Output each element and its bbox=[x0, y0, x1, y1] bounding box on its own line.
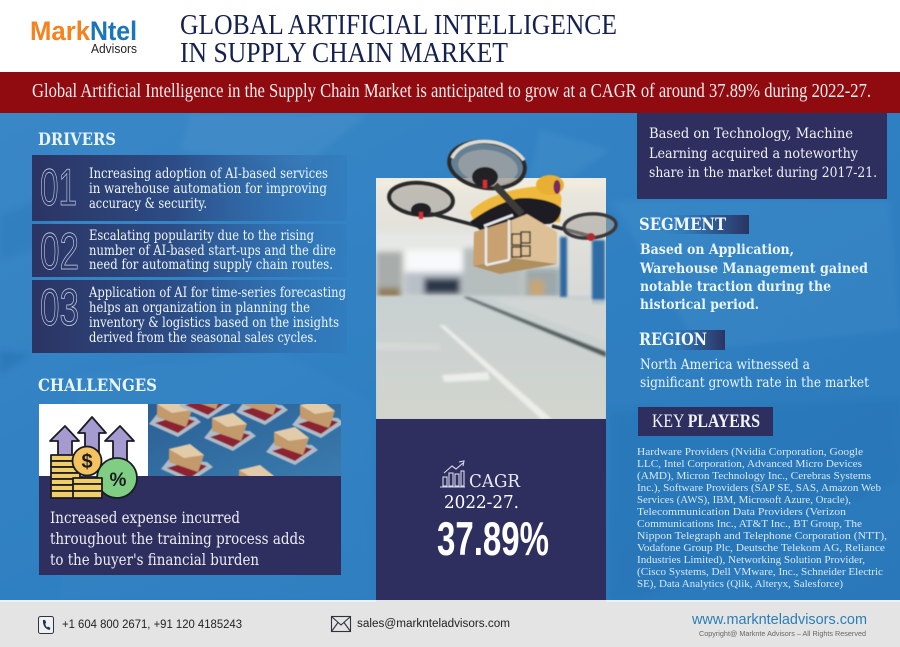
driver 01 bbox=[32, 155, 347, 221]
panel: challenges: % bbox=[110, 470, 127, 491]
segment text: historical period. bbox=[640, 297, 759, 313]
key players list: Hardware Providers (Nvidia Corporation, Google bbox=[637, 446, 863, 458]
panel: technology callout bbox=[637, 113, 887, 199]
panel: challenges: $ bbox=[81, 451, 93, 473]
region text: significant growth rate in the market bbox=[640, 375, 870, 391]
cagr label: CAGR bbox=[469, 471, 520, 492]
driver 02: number of AI-based start-ups and the dire bbox=[89, 243, 336, 259]
segment text: notable traction during the bbox=[640, 279, 831, 295]
title: IN SUPPLY CHAIN MARKET bbox=[180, 37, 508, 69]
segment text: Based on Application, bbox=[640, 242, 794, 258]
right rotor bbox=[563, 212, 617, 241]
driver 03: helps an organization in planning the bbox=[89, 300, 310, 316]
key players list: Communications Inc., AT&T Inc., BT Group, The bbox=[637, 518, 862, 530]
challenge text: Increased expense incurred bbox=[50, 509, 240, 527]
driver 01: accuracy & security. bbox=[89, 196, 207, 212]
top rotor bbox=[446, 137, 528, 214]
key players list: (Cisco Systems, Dell VMware, Inc., Schneider Electric bbox=[637, 566, 883, 578]
heading: region: REGION bbox=[639, 330, 707, 350]
left rotor bbox=[388, 180, 454, 219]
segment text: Warehouse Management gained bbox=[639, 261, 868, 277]
arms bbox=[425, 212, 590, 236]
panel: challenges bbox=[39, 404, 341, 575]
driver 02: 02 bbox=[40, 223, 79, 281]
key players list: Inc.), Software Providers (SAP SE, SAS, Amazon Web bbox=[637, 482, 882, 494]
key players list: LLC, Intel Corporation, Advanced Micro Devices bbox=[637, 458, 862, 470]
title bbox=[180, 9, 617, 69]
logo: MarkNtel Advisors: Advisors bbox=[91, 42, 137, 56]
drone body bbox=[470, 186, 562, 224]
driver 02 bbox=[32, 223, 347, 281]
driver 03: derived from the seasonal sales cycles. bbox=[89, 330, 317, 346]
driver 01: 01 bbox=[40, 159, 77, 217]
heading: key players: KEY PLAYERS bbox=[652, 412, 760, 432]
icon: envelope bbox=[332, 616, 350, 632]
icon: rising costs bbox=[50, 417, 137, 498]
driver 03: Application of AI for time-series forecasting bbox=[88, 285, 346, 301]
key players list bbox=[637, 446, 887, 590]
phone numbers: +1 604 800 2671, +91 120 4185243 bbox=[62, 619, 242, 631]
email: sales@marknteladvisors.com bbox=[357, 618, 510, 630]
parcel bbox=[473, 220, 512, 266]
driver 02: Escalating popularity due to the rising bbox=[89, 228, 314, 244]
copyright: Copyright@ Marknte Advisors – All Rights Reserved bbox=[699, 629, 866, 638]
driver 03 bbox=[32, 279, 347, 353]
driver 03: 03 bbox=[40, 279, 79, 337]
photo: boxes on robots bbox=[148, 404, 341, 476]
red banner bbox=[0, 72, 900, 113]
challenge text: throughout the training process adds bbox=[50, 530, 305, 548]
website: www.marknteladvisors.com bbox=[691, 611, 867, 628]
logo: MarkNtel Advisors: Mark bbox=[30, 16, 91, 46]
cagr value: 37.89% bbox=[437, 512, 549, 565]
heading: key players bbox=[638, 407, 773, 436]
icon: delivery drone bbox=[388, 137, 617, 274]
navy text panel bbox=[39, 476, 341, 575]
region text bbox=[640, 357, 870, 391]
panel: CAGR bbox=[376, 419, 606, 600]
logo: MarkNtel Advisors bbox=[30, 16, 137, 56]
segment text bbox=[639, 242, 868, 313]
heading: segment: SEGMENT bbox=[639, 215, 726, 235]
icon: growth chart bbox=[440, 461, 465, 487]
logo: MarkNtel Advisors: Ntel bbox=[90, 16, 137, 46]
challenge text: to the buyer's financial burden bbox=[50, 551, 259, 569]
driver 01: in warehouse automation for improving bbox=[89, 181, 327, 197]
cagr period: 2022-27. bbox=[444, 492, 519, 513]
key players list: Nippon Telegraph and Telephone Corporation (NTT), bbox=[637, 530, 887, 542]
background: blue panel bbox=[0, 113, 900, 600]
heading: challenges: CHALLENGES bbox=[38, 376, 157, 396]
title: GLOBAL ARTIFICIAL INTELLIGENCE bbox=[180, 9, 617, 41]
key players list: Services (AWS), IBM, Microsoft Azure, Oracle), bbox=[637, 494, 851, 506]
driver 03: inventory & logistics based on the insights bbox=[89, 315, 339, 331]
panel: technology callout: share in the market during 2017-21. bbox=[649, 165, 877, 181]
key players list: Telecommunication Data Providers (Verizon bbox=[637, 506, 847, 518]
key players list: SE), Data Analytics (Qlik, Alteryx, Salesforce) bbox=[637, 578, 843, 590]
panel: technology callout: Based on Technology, Machine bbox=[649, 126, 853, 142]
footer bbox=[0, 600, 900, 647]
heading: drivers: DRIVERS bbox=[38, 130, 116, 150]
icon: phone bbox=[38, 616, 54, 634]
photo: warehouse background bbox=[376, 178, 606, 419]
white icon backdrop bbox=[39, 404, 148, 476]
header background bbox=[0, 0, 900, 72]
region text: North America witnessed a bbox=[640, 357, 810, 373]
key players list: (AMD), Micron Technology Inc., Cerebras Systems bbox=[637, 470, 871, 482]
key players list: Industries Limited), Networking Solution Provider, bbox=[637, 554, 865, 566]
driver 01: Increasing adoption of AI-based services bbox=[89, 166, 328, 182]
panel: technology callout: Learning acquired a noteworthy bbox=[649, 146, 858, 162]
challenge text bbox=[50, 509, 305, 569]
key players list: Vodafone Group Plc, Deutsche Telekom AG, Reliance bbox=[637, 542, 885, 554]
driver 02: need for automating supply chain routes. bbox=[89, 257, 333, 273]
